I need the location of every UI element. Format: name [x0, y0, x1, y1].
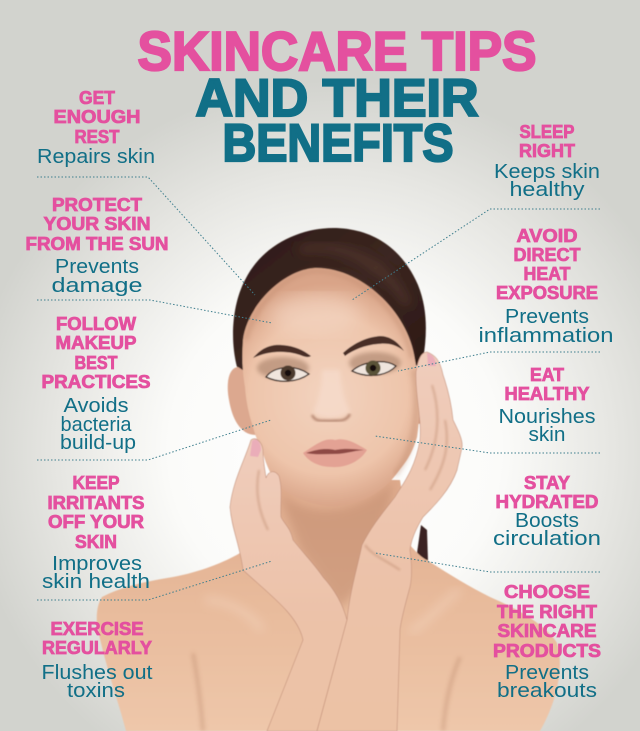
tip: choose right products: SKINCARE	[498, 621, 596, 641]
finger creases	[257, 385, 447, 570]
tip: keep irritants off: SKIN	[75, 532, 117, 552]
left hand and forearm	[230, 439, 347, 731]
tip: keep irritants off: Improves	[52, 553, 142, 575]
tip: choose right products: PRODUCTS	[493, 641, 601, 661]
left eye	[257, 357, 309, 381]
hairline shadow	[246, 271, 412, 358]
tip: eat healthy: EAT	[530, 365, 564, 385]
collarbone highlights	[205, 590, 460, 632]
forehead highlight	[270, 295, 360, 335]
tip: choose right products: CHOOSE	[504, 582, 590, 602]
tip: get enough rest: GET	[79, 88, 115, 108]
tip: stay hydrated: Boosts	[515, 510, 579, 532]
tip: exercise regularly	[42, 619, 153, 702]
tip: eat healthy: HEALTHY	[504, 384, 590, 404]
tip: sleep right: RIGHT	[519, 141, 575, 161]
tip: protect your skin: FROM THE SUN	[26, 234, 168, 254]
neck shadow	[278, 480, 395, 610]
tip: choose right products: Prevents	[505, 662, 589, 684]
tip: get enough rest	[37, 88, 155, 168]
tip: choose right products	[493, 582, 601, 702]
tip: keep irritants off: IRRITANTS	[48, 493, 144, 513]
tip: keep irritants off	[42, 473, 150, 593]
tip: sleep right: healthy	[510, 179, 584, 201]
tip: exercise regularly: toxins	[67, 680, 125, 702]
left eyebrow	[253, 345, 311, 358]
tip: avoid direct heat	[478, 226, 614, 347]
tip: protect your skin: Prevents	[55, 256, 139, 278]
tip: exercise regularly: Flushes out	[42, 662, 153, 684]
tip: makeup practices: build-up	[60, 432, 136, 454]
tip: stay hydrated: circulation	[493, 528, 601, 550]
hair back	[233, 228, 426, 380]
title: AND THEIR	[196, 69, 478, 128]
tip: protect your skin: PROTECT	[52, 195, 142, 215]
tip: protect your skin: damage	[52, 275, 142, 297]
hair shine	[300, 248, 408, 305]
tip: sleep right: Keeps skin	[494, 161, 600, 183]
tip: stay hydrated: STAY	[524, 473, 570, 493]
tip: avoid direct heat: inflammation	[478, 325, 614, 347]
tip: makeup practices	[42, 314, 150, 454]
tip: avoid direct heat: HEAT	[524, 264, 570, 284]
tip: protect your skin: YOUR SKIN	[44, 214, 150, 234]
tip: makeup practices: bacteria	[60, 414, 132, 436]
tip: choose right products: breakouts	[497, 680, 597, 702]
face	[242, 268, 419, 506]
tip: makeup practices: BEST	[74, 353, 118, 373]
tip: get enough rest: REST	[74, 127, 120, 147]
title: SKINCARE TIPS	[138, 20, 536, 82]
tip: avoid direct heat: DIRECT	[514, 245, 581, 265]
tip: exercise regularly: REGULARLY	[42, 638, 152, 658]
illustration: woman portrait	[97, 228, 560, 731]
torso and shoulders	[97, 480, 560, 731]
tip: avoid direct heat: AVOID	[516, 226, 578, 246]
tip: keep irritants off: skin health	[42, 571, 150, 593]
tip: avoid direct heat: Prevents	[505, 306, 589, 328]
title: BENEFITS	[222, 114, 454, 173]
right hand and forearm	[317, 352, 462, 731]
tip: sleep right	[494, 122, 600, 201]
face side shadow	[395, 370, 416, 475]
right eye	[349, 352, 401, 376]
tip: makeup practices: Avoids	[64, 395, 128, 417]
lips	[303, 439, 367, 467]
tip: exercise regularly: EXERCISE	[50, 619, 144, 639]
title	[138, 20, 536, 173]
tip: eat healthy: Nourishes	[498, 406, 596, 428]
left ear	[228, 367, 258, 435]
tip: avoid direct heat: EXPOSURE	[496, 283, 598, 303]
tip: eat healthy: skin	[528, 424, 566, 446]
hair strand behind neck	[416, 525, 428, 562]
right ear	[415, 395, 432, 425]
connector lines	[37, 177, 600, 600]
tip: keep irritants off: OFF YOUR	[48, 512, 144, 532]
tip: makeup practices: FOLLOW	[56, 314, 136, 334]
tip: sleep right: SLEEP	[520, 122, 574, 142]
tip: get enough rest: ENOUGH	[54, 107, 140, 127]
tip: protect your skin	[26, 195, 168, 297]
right eyebrow	[343, 336, 404, 356]
tip: eat healthy	[498, 365, 596, 446]
nose	[313, 370, 350, 418]
tip: keep irritants off: KEEP	[72, 473, 120, 493]
tip: stay hydrated	[493, 473, 601, 550]
tip: stay hydrated: HYDRATED	[496, 492, 598, 512]
tip: get enough rest: Repairs skin	[37, 146, 155, 168]
tip: makeup practices: MAKEUP	[56, 333, 136, 353]
armpit creases	[193, 653, 460, 731]
tip: makeup practices: PRACTICES	[42, 372, 150, 392]
nails	[250, 353, 436, 457]
tip: choose right products: THE RIGHT	[497, 602, 597, 622]
